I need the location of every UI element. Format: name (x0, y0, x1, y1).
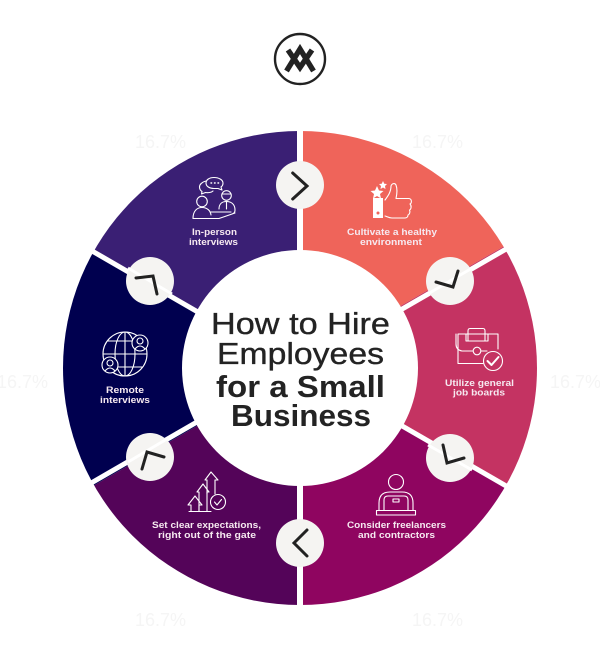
faint percentage labels: 16.7% (550, 372, 600, 392)
label: cultivate: Cultivate a healthy (347, 227, 438, 238)
centre circle with title (182, 250, 418, 486)
label: expectations (152, 520, 261, 541)
icon: thumbs up (370, 181, 411, 218)
label: in-person interviews (189, 227, 238, 248)
panel: remote interviews wedge (63, 254, 198, 486)
icon: rising arrows with check (188, 472, 226, 512)
arrow: upper right (426, 257, 474, 305)
label: freelancers: and contractors (358, 530, 435, 541)
panel: in-person interviews wedge (94, 131, 297, 310)
faint percentage labels (0, 132, 600, 630)
icon: globe with avatars (102, 332, 148, 376)
label: expectations: Set clear expectations, (152, 520, 261, 531)
label: cultivate (347, 227, 438, 248)
panel: cultivate wedge (303, 131, 504, 306)
faint percentage labels: 16.7% (135, 610, 186, 630)
label: remote interviews: Remote (106, 385, 144, 396)
label: job boards (445, 378, 514, 398)
panel: freelancers wedge (303, 428, 504, 605)
label: in-person interviews: interviews (189, 237, 238, 248)
label: expectations: right out of the gate (158, 530, 256, 541)
icon: briefcase (456, 328, 502, 370)
centre circle with title: How to Hire (211, 307, 390, 341)
arrow: bottom chevron (276, 519, 324, 567)
logo (275, 34, 325, 84)
label: remote interviews: interviews (100, 395, 150, 406)
faint percentage labels: 16.7% (412, 132, 463, 152)
arrow: lower right (426, 434, 474, 482)
faint percentage labels: 16.7% (412, 610, 463, 630)
icon: in-person interview (193, 178, 235, 218)
arrow: upper left (126, 257, 174, 305)
panel: expectations wedge (94, 426, 297, 605)
arrow: lower left (126, 433, 174, 481)
centre circle with title: Business (231, 399, 371, 433)
arrow: right chevron (276, 161, 324, 209)
label: freelancers: Consider freelancers (347, 520, 446, 531)
centre circle with title: for a Small (216, 370, 385, 404)
label: in-person interviews: In-person (192, 227, 237, 238)
panel: job boards wedge (400, 246, 537, 484)
label: cultivate: environment (360, 237, 423, 248)
label: freelancers (347, 520, 446, 541)
label: job boards: job boards (452, 388, 505, 398)
icon: freelancer at laptop (376, 474, 416, 515)
centre circle with title: Employees (217, 337, 384, 371)
label: remote interviews (100, 385, 150, 406)
panel: wedges (63, 131, 537, 605)
separators (80, 125, 520, 610)
faint percentage labels: 16.7% (135, 132, 186, 152)
label: job boards: Utilize general (445, 378, 514, 389)
